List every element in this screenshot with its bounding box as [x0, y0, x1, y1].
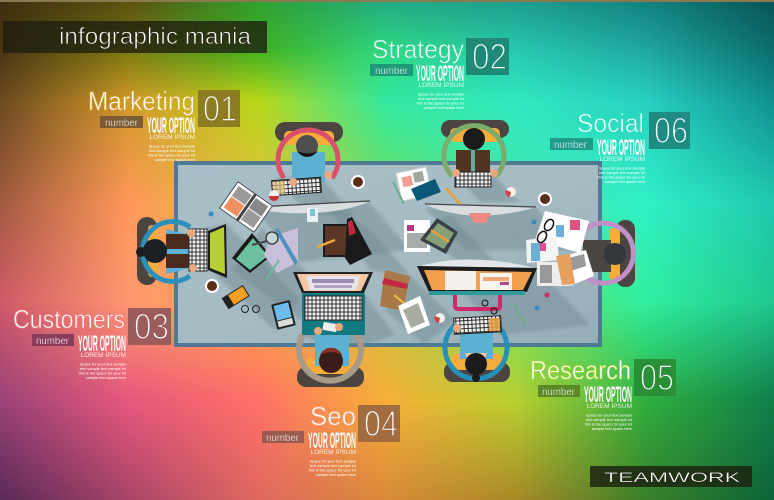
person: top right at table [441, 120, 509, 187]
block 02: Strategy: Strategy [372, 34, 464, 64]
block 01: Marketing: this is the space for your txt [148, 152, 196, 158]
block 05: Research [530, 355, 676, 431]
title banner: infographic mania [59, 23, 251, 49]
block 02: Strategy: number [375, 66, 409, 77]
block 06: Social: 06 [654, 110, 688, 151]
monitor seen from above, left [255, 201, 370, 222]
table [176, 163, 600, 345]
block 06: Social: sample text space here [605, 179, 645, 184]
block 03: Customers: Customers [13, 304, 125, 334]
block 05: Research: sample text space here [592, 426, 632, 431]
block 06: Social: text sample text sample txt [599, 170, 646, 175]
block 04: Seo: 04 [364, 403, 398, 444]
block 05: Research: Space for your text sample [586, 412, 632, 418]
block 04: Seo [262, 401, 400, 477]
block 03: Customers: this is the space for your txt [79, 370, 127, 376]
block 02: Strategy: sample text space here [424, 105, 464, 110]
phones and glasses [222, 285, 296, 330]
block 05: Research: 05 [640, 357, 674, 398]
person: right of table [576, 220, 635, 287]
block 06: Social: Space for your text sample [599, 166, 645, 170]
person: left of table [136, 217, 227, 285]
block 04: Seo: sample text space here [316, 472, 356, 477]
block 03: Customers: number [36, 336, 70, 347]
block 06: Social: YOUR OPTION [597, 135, 645, 160]
block 03: Customers: YOUR OPTION [78, 331, 126, 356]
block 01: Marketing: LOREM IPSUM [149, 134, 195, 141]
person: top left at table [272, 122, 343, 196]
block 05: Research: LOREM IPSUM [586, 403, 632, 410]
person: bottom right at table [444, 316, 510, 382]
block 03: Customers: LOREM IPSUM [80, 352, 126, 359]
block 06: Social: Social [577, 108, 644, 138]
block 04: Seo: this is the space for your txt [309, 468, 357, 472]
block 01: Marketing: YOUR OPTION [147, 113, 195, 138]
block 03: Customers [13, 304, 171, 380]
block 01: Marketing: number [105, 118, 139, 129]
block 05: Research: text sample text sample txt [586, 417, 633, 422]
open laptop [293, 272, 373, 335]
middle documents [404, 218, 458, 254]
block 01: Marketing: 01 [203, 88, 237, 129]
block 02: Strategy: Space for your text sample [418, 92, 464, 96]
block 02: Strategy: text sample text sample txt [418, 96, 465, 101]
block 05: Research: YOUR OPTION [584, 382, 632, 407]
block 04: Seo: Space for your text sample [310, 458, 356, 464]
block 02: Strategy: LOREM IPSUM [418, 82, 464, 89]
table shadows [205, 172, 590, 345]
person: bottom left at table [297, 326, 364, 387]
block 02: Strategy [370, 34, 509, 110]
block 01: Marketing [88, 86, 240, 162]
block 03: Customers: Space for your text sample [80, 362, 126, 366]
open notebook [220, 182, 272, 232]
desktop monitor, facing person [417, 259, 537, 314]
right hand papers and glasses [526, 211, 594, 286]
block 02: Strategy: 02 [472, 36, 507, 77]
block 06: Social: LOREM IPSUM [599, 156, 645, 163]
block 04: Seo: number [266, 433, 300, 444]
block 01: Marketing: text sample text sample txt [149, 148, 196, 153]
block 01: Marketing: Space for your text sample [149, 144, 195, 148]
teamwork banner [590, 466, 752, 487]
block 01: Marketing: Marketing [88, 86, 195, 116]
block 04: Seo: Seo [310, 401, 356, 431]
block 05: Research: number [542, 387, 576, 398]
block 03: Customers: sample text space here [86, 375, 126, 380]
teamwork banner: TEAMWORK [604, 469, 741, 485]
monitor seen from above, right [425, 204, 536, 223]
coffee cups [205, 175, 552, 293]
block 06: Social: number [554, 140, 588, 151]
block 04: Seo: LOREM IPSUM [310, 449, 356, 456]
block 03: Customers: text sample text sample txt [80, 366, 127, 371]
green book and magnifier [232, 228, 298, 280]
block 06: Social: this is the space for your txt [598, 174, 646, 180]
black notebook with pencil [317, 217, 372, 265]
block 04: Seo: text sample text sample txt [310, 463, 357, 468]
block 05: Research: this is the space for your txt [585, 422, 633, 426]
block 06: Social [550, 108, 690, 184]
block 04: Seo: YOUR OPTION [308, 428, 356, 453]
title banner [3, 21, 267, 53]
block 02: Strategy: YOUR OPTION [416, 61, 464, 86]
pie marker balls, pins and pencil [208, 187, 550, 326]
block 01: Marketing: sample text space here [155, 157, 195, 162]
block 02: Strategy: this is the space for your txt [417, 100, 465, 106]
block 05: Research: Research [530, 355, 631, 385]
brown book and note [380, 270, 430, 334]
block 03: Customers: 03 [134, 306, 169, 347]
top right papers [393, 167, 460, 204]
